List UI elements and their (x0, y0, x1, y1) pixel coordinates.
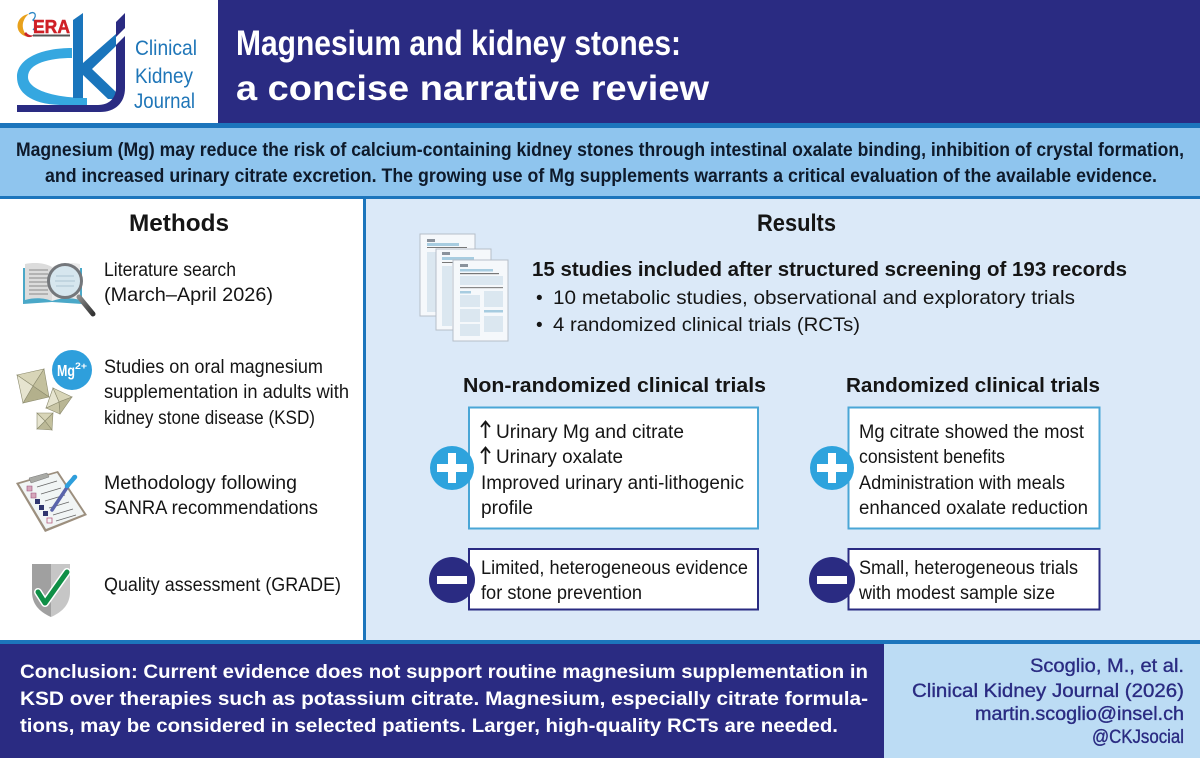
box: non-randomized limitations: for stone prevention (481, 583, 642, 604)
icon: book and magnifier (23, 263, 93, 314)
icon: plus (810, 446, 854, 490)
study selection summary: 4 randomized clinical trials (RCTs) (553, 315, 860, 336)
panel: conclusion: KSD over therapies such as potassium citrate. Magnesium, especially citrate formula- (20, 688, 868, 710)
box: randomized limitations (848, 549, 1100, 610)
logo wordmark: Kidney (135, 65, 193, 88)
methods heading: Methods (129, 210, 229, 237)
icon: minus (809, 557, 855, 603)
box: randomized benefits (848, 408, 1100, 528)
heading: non-randomized clinical trials: Non-randomized clinical trials (463, 374, 766, 397)
box: non-randomized benefits (469, 408, 758, 528)
header logo: Clinical Kidney Journal (0, 0, 218, 123)
study selection summary: • (536, 288, 543, 309)
title banner: a concise narrative review (236, 69, 710, 108)
icon: magnesium crystals: Mg (57, 363, 75, 380)
logo letters CKJ (17, 13, 125, 112)
icon: magnesium crystals: 2+ (75, 361, 87, 371)
results heading: Results (757, 210, 836, 237)
icon: magnesium crystals (17, 350, 92, 430)
icon: clipboard checklist (16, 471, 87, 532)
text: oral magnesium studies: kidney stone disease (KSD) (104, 408, 315, 429)
box: non-randomized benefits: profile (481, 498, 533, 519)
study selection summary: 15 studies included after structured screening of 193 records (532, 258, 1127, 281)
study selection summary (532, 258, 1127, 336)
panel: conclusion: tions, may be considered in selected patients. Larger, high-quality RCTs are needed. (20, 715, 838, 737)
box: non-randomized limitations: Limited, heterogeneous evidence (481, 558, 748, 579)
text: oral magnesium studies (104, 357, 349, 429)
logo wordmark: Journal (134, 90, 195, 113)
ERA emblem (18, 13, 70, 37)
panel: results (363, 199, 1200, 640)
panel: conclusion: Conclusion: Current evidence does not support routine magnesium supplementation in (20, 661, 868, 683)
panel: citation: martin.scoglio@insel.ch (975, 704, 1184, 725)
text: oral magnesium studies: supplementation in adults with (104, 382, 349, 403)
icon: minus (429, 557, 475, 603)
panel: methods (0, 199, 363, 640)
box: randomized limitations: Small, heterogeneous trials (859, 558, 1078, 579)
logo wordmark: Clinical (135, 37, 197, 60)
text: methodology: Methodology following (104, 473, 297, 494)
text: literature search (104, 260, 273, 306)
box: randomized benefits: Administration with meals (859, 473, 1065, 494)
box: randomized benefits: consistent benefits (859, 447, 1005, 468)
text: literature search: Literature search (104, 260, 236, 281)
icon: stacked study documents (420, 234, 508, 341)
box: randomized benefits: enhanced oxalate reduction (859, 498, 1088, 519)
icon: shield with check mark (32, 564, 70, 617)
title banner: Magnesium and kidney stones: (236, 24, 681, 63)
text: quality assessment: Quality assessment (GRADE) (104, 575, 341, 596)
box: non-randomized benefits: Improved urinary anti-lithogenic (481, 473, 744, 494)
panel: citation (884, 644, 1200, 758)
heading: randomized clinical trials: Randomized clinical trials (846, 374, 1100, 397)
text: literature search: (March–April 2026) (104, 285, 273, 306)
study selection summary: • (536, 315, 543, 336)
text: methodology (104, 473, 318, 519)
introduction band (0, 123, 1200, 199)
box: randomized benefits: Mg citrate showed the most (859, 422, 1085, 443)
box: randomized limitations: with modest sample size (858, 583, 1055, 604)
text: methodology: SANRA recommendations (104, 498, 318, 519)
text: oral magnesium studies: Studies on oral magnesium (104, 357, 323, 378)
panel: conclusion (0, 640, 1200, 758)
box: non-randomized benefits: Urinary Mg and citrate (496, 422, 684, 443)
panel: citation: Clinical Kidney Journal (2026) (912, 681, 1184, 702)
title banner (218, 0, 1200, 123)
introduction band: and increased urinary citrate excretion. The growing use of Mg supplements warrants a critical evaluation of the available evidence. (45, 166, 1157, 187)
logo wordmark (134, 37, 197, 113)
box: non-randomized benefits: Urinary oxalate (496, 447, 623, 468)
box: non-randomized limitations (469, 549, 758, 610)
panel: citation: Scoglio, M., et al. (1030, 656, 1184, 677)
ERA emblem: ERA (33, 17, 70, 37)
icon: plus (430, 446, 474, 490)
study selection summary: 10 metabolic studies, observational and exploratory trials (553, 288, 1075, 309)
panel: citation: @CKJsocial (1092, 727, 1184, 748)
